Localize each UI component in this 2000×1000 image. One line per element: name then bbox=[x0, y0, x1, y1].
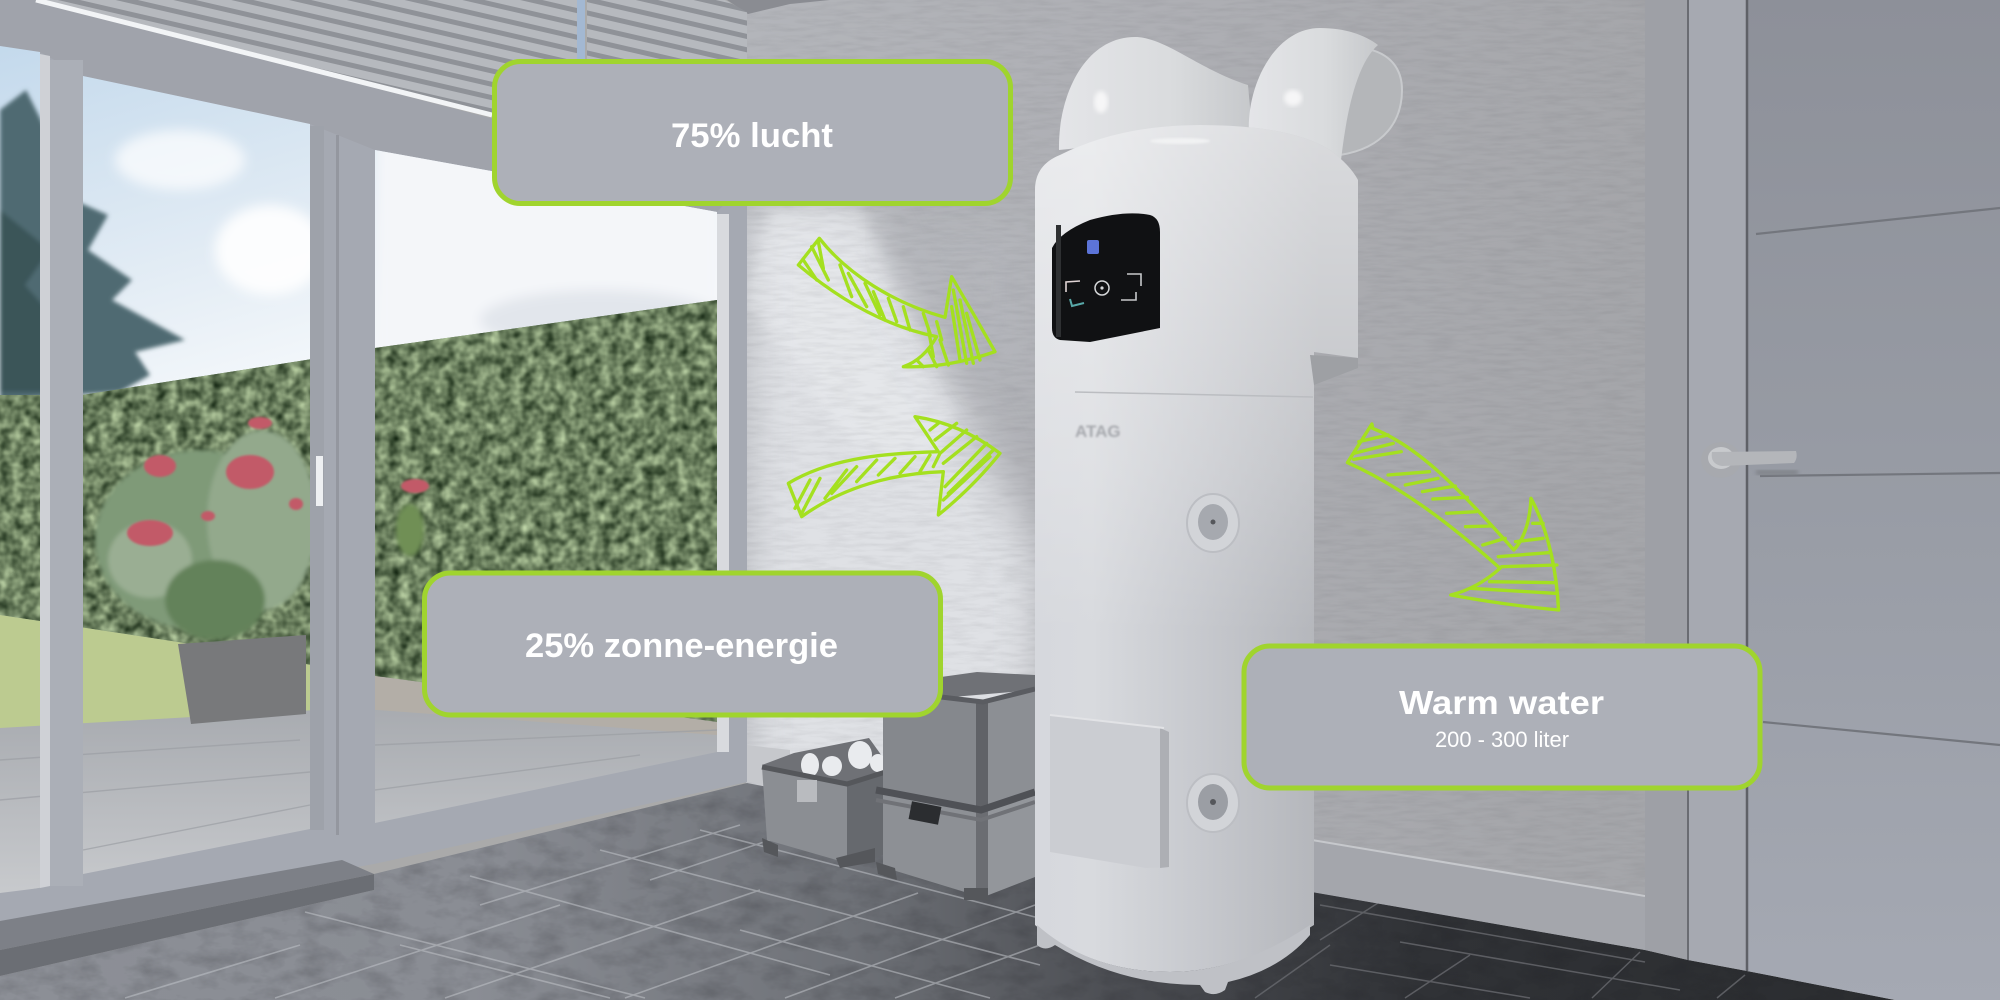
door bbox=[1747, 0, 2000, 1000]
callout: air share bbox=[494, 62, 1010, 204]
small crate bbox=[762, 738, 892, 868]
ceiling corner bbox=[727, 0, 830, 14]
door handle on sliding window bbox=[316, 456, 323, 506]
tree bbox=[0, 90, 185, 400]
callout: warm water output: Warm water bbox=[1399, 684, 1604, 721]
upper crate bbox=[883, 672, 1035, 812]
threshold sill bbox=[0, 860, 374, 976]
control panel bbox=[1052, 213, 1160, 342]
service cover bbox=[1050, 715, 1169, 868]
hedge bbox=[0, 295, 720, 730]
callout: air share: 75% lucht bbox=[671, 117, 833, 155]
floor bbox=[0, 780, 1900, 1000]
duct: left elbow bbox=[1059, 37, 1252, 150]
door handle bbox=[1701, 442, 1798, 478]
arrow: air into boiler bbox=[798, 238, 995, 367]
sky bbox=[0, 46, 717, 395]
blinds bbox=[36, 0, 747, 180]
callout: solar share: 25% zonne-energie bbox=[525, 627, 838, 665]
lower crate bbox=[876, 790, 1035, 900]
storage crates bbox=[762, 672, 1035, 900]
plant foliage bbox=[95, 430, 424, 640]
plant pot bbox=[178, 635, 306, 724]
patio bbox=[0, 708, 717, 895]
skirting board bbox=[746, 745, 1645, 950]
boiler body bbox=[1035, 125, 1358, 972]
window frame bbox=[0, 0, 747, 930]
duct: right elbow bbox=[1249, 28, 1402, 170]
port: upper bbox=[1187, 494, 1239, 552]
brand logo: ATAG bbox=[1075, 422, 1121, 441]
clouds bbox=[112, 126, 716, 332]
garden view through window bbox=[0, 40, 720, 895]
door frame bbox=[1645, 0, 1747, 971]
port: lower bbox=[1187, 774, 1239, 832]
boiler base ring bbox=[1037, 925, 1310, 994]
arrow: solar energy into boiler bbox=[788, 417, 1000, 517]
wall bbox=[746, 0, 1646, 960]
lawn bbox=[0, 615, 310, 728]
heat pump boiler bbox=[1035, 28, 1402, 994]
gravel bbox=[375, 676, 717, 735]
callout: warm water output bbox=[1244, 646, 1760, 788]
flowers bbox=[127, 417, 429, 546]
callout: warm water output: 200 - 300 liter bbox=[1435, 727, 1569, 752]
callout: solar share bbox=[424, 573, 940, 715]
arrow: hot water out of boiler bbox=[1347, 424, 1559, 610]
